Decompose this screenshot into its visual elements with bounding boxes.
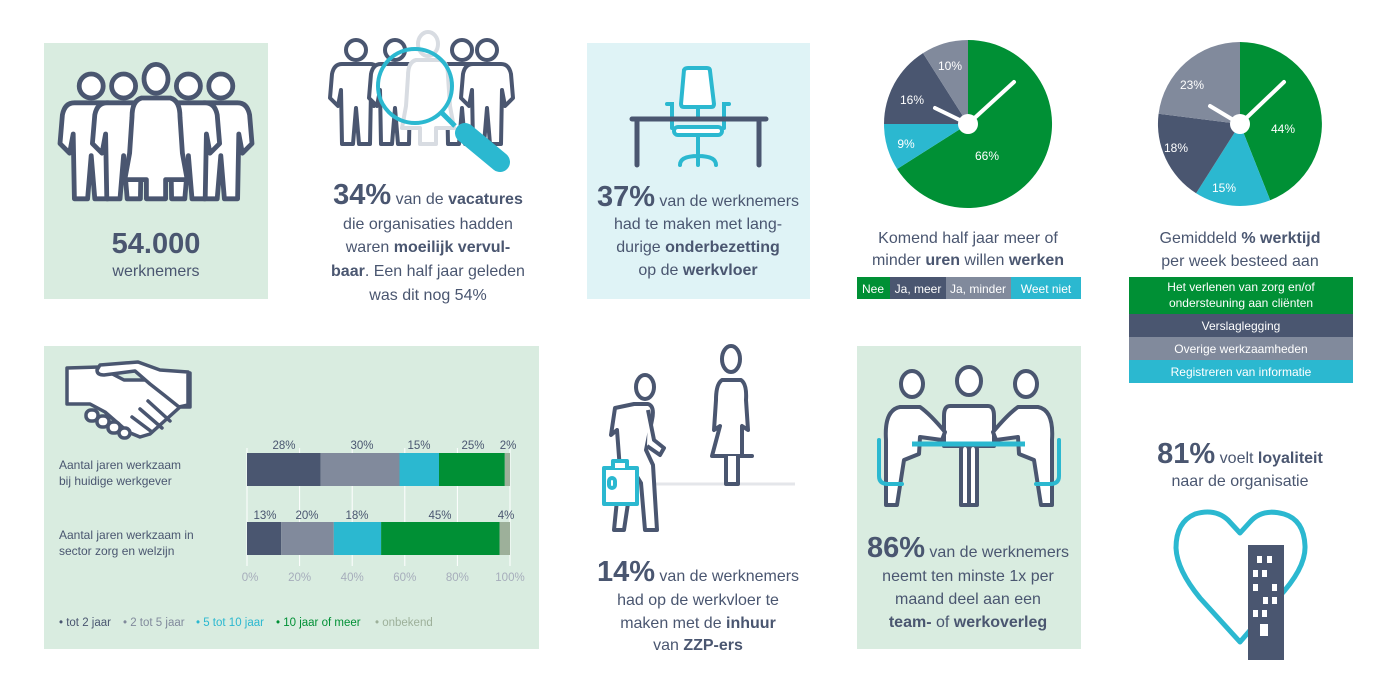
chart: stacked bars: 18% [345, 510, 369, 522]
legend: jaren: • onbekend [375, 617, 433, 629]
legend: jaren: • 2 tot 5 jaar [123, 617, 185, 629]
chart: pie werktijd: 18% [1164, 141, 1188, 155]
text: caption werktijd: per week besteed aan [1161, 253, 1319, 270]
chart: stacked bars: 40% [341, 572, 364, 584]
chart: stacked bars: 100% [495, 572, 525, 584]
chart: stacked bars [242, 440, 525, 584]
text: 34% vacatures: baar. Een half jaar geleden [331, 263, 525, 280]
icon: walker and woman with briefcase [604, 346, 795, 530]
panel: vacatures [330, 32, 525, 304]
panel: 54.000 werknemers [44, 43, 268, 299]
icon: desk and chair [632, 68, 766, 165]
legend: uren: Nee [862, 282, 884, 296]
text: 14% ZZP-ers [597, 556, 799, 654]
text: row labels: sector zorg en welzijn [59, 544, 174, 558]
legend: uren: Weet niet [1021, 282, 1072, 296]
legend: werktijd: Het verlenen van zorg en/of [1167, 280, 1315, 294]
text: 34% vacatures: was dit nog 54% [368, 287, 487, 304]
text: 81% loyaliteit: naar de organisatie [1172, 473, 1309, 490]
panel: ZZP-ers [597, 346, 799, 654]
text: 34% vacatures: 34% van de vacatures [333, 179, 523, 211]
text: caption werktijd [1160, 230, 1320, 270]
text: row labels: Aantal jaren werkzaam [59, 458, 181, 472]
chart: pie werktijd: 15% [1212, 181, 1236, 195]
chart: pie werktijd [1158, 42, 1322, 206]
text: row labels: bij huidige werkgever [59, 474, 172, 488]
panel: uren willen werken [857, 40, 1081, 299]
text: 86% werkoverleg: team- of werkoverleg [889, 614, 1047, 631]
legend: werktijd: ondersteuning aan cliënten [1169, 296, 1313, 310]
legend: werktijd [1129, 277, 1353, 383]
chart: stacked bars: 80% [446, 572, 469, 584]
legend: jaren: • 5 tot 10 jaar [196, 617, 264, 629]
chart: pie werktijd: 44% [1271, 122, 1295, 136]
chart: pie uren [884, 40, 1052, 208]
chart: stacked bars: 13% [253, 510, 277, 522]
chart: pie werktijd: 23% [1180, 78, 1204, 92]
legend: jaren: • 10 jaar of meer [276, 617, 361, 629]
chart: stacked bars: 60% [393, 572, 416, 584]
text: caption uren [872, 230, 1064, 269]
icon: heart with building [1176, 512, 1305, 660]
chart: stacked bars: 4% [498, 510, 514, 522]
text: 86% werkoverleg: neemt ten minste 1x per [882, 568, 1054, 585]
legend: jaren [59, 617, 433, 629]
chart: stacked bars: 15% [407, 440, 431, 452]
legend: uren: Ja, minder [950, 282, 1006, 296]
chart: pie uren: 10% [938, 59, 962, 73]
chart: pie uren: 16% [900, 93, 924, 107]
text: 37% onderbezetting: op de werkvloer [638, 262, 758, 279]
text: 86% werkoverleg: maand deel aan een [895, 591, 1041, 608]
chart: stacked bars: 0% [242, 572, 258, 584]
text: 14% ZZP-ers: maken met de inhuur [620, 615, 776, 632]
text: 37% onderbezetting: had te maken met lang- [614, 216, 782, 233]
chart: stacked bars: 20% [295, 510, 319, 522]
legend: uren [857, 277, 1081, 299]
text: 37% onderbezetting [597, 181, 799, 279]
chart: stacked bars: 28% [272, 440, 296, 452]
legend: werktijd: Overige werkzaamheden [1174, 342, 1308, 356]
panel: werkoverleg [857, 346, 1081, 649]
chart: pie uren: 66% [975, 149, 999, 163]
text: 14% ZZP-ers: 14% van de werknemers [597, 556, 799, 588]
text: caption uren: Komend half jaar meer of [878, 230, 1058, 247]
legend: werktijd: Registreren van informatie [1171, 365, 1312, 379]
text: 34% vacatures: die organisaties hadden [343, 216, 513, 233]
legend: jaren: • tot 2 jaar [59, 617, 111, 629]
text: 37% onderbezetting: durige onderbezetting [616, 239, 780, 256]
text: 86% werkoverleg [867, 532, 1069, 631]
text: caption uren: minder uren willen werken [872, 252, 1064, 269]
chart: stacked bars: 2% [500, 440, 516, 452]
text: 81% loyaliteit [1157, 438, 1323, 490]
chart: pie uren: 9% [897, 137, 915, 151]
text: 37% onderbezetting: 37% van de werknemers [597, 181, 799, 213]
chart: stacked bars: 45% [428, 510, 452, 522]
panel: jaren werkzaam [44, 346, 539, 649]
text: 81% loyaliteit: 81% voelt loyaliteit [1157, 438, 1323, 470]
text: werknemers: werknemers [111, 263, 200, 280]
icon: group of people [60, 64, 252, 199]
icon: people with magnifier [330, 32, 513, 162]
text: 34% vacatures: waren moeilijk vervul- [345, 239, 510, 256]
legend: uren: Ja, meer [895, 282, 941, 296]
text: 34% vacatures [331, 179, 525, 304]
text: 14% ZZP-ers: van ZZP-ers [653, 637, 743, 654]
icon: meeting [879, 367, 1059, 505]
chart: stacked bars: 30% [350, 440, 374, 452]
text: row labels [59, 458, 194, 558]
panel: onderbezetting [587, 43, 810, 299]
text: caption werktijd: Gemiddeld % werktijd [1160, 230, 1320, 247]
panel: werktijd [1129, 42, 1353, 383]
text: 14% ZZP-ers: had op de werkvloer te [617, 592, 779, 609]
text: row labels: Aantal jaren werkzaam in [59, 528, 194, 542]
text: 86% werkoverleg: 86% van de werknemers [867, 532, 1069, 564]
panel: loyaliteit [1157, 438, 1323, 660]
legend: werktijd: Verslaglegging [1202, 319, 1280, 333]
chart: stacked bars: 25% [461, 440, 485, 452]
chart: stacked bars: 20% [288, 572, 311, 584]
icon: handshake [67, 362, 190, 438]
heading: 54.000: 54.000 [112, 228, 200, 260]
